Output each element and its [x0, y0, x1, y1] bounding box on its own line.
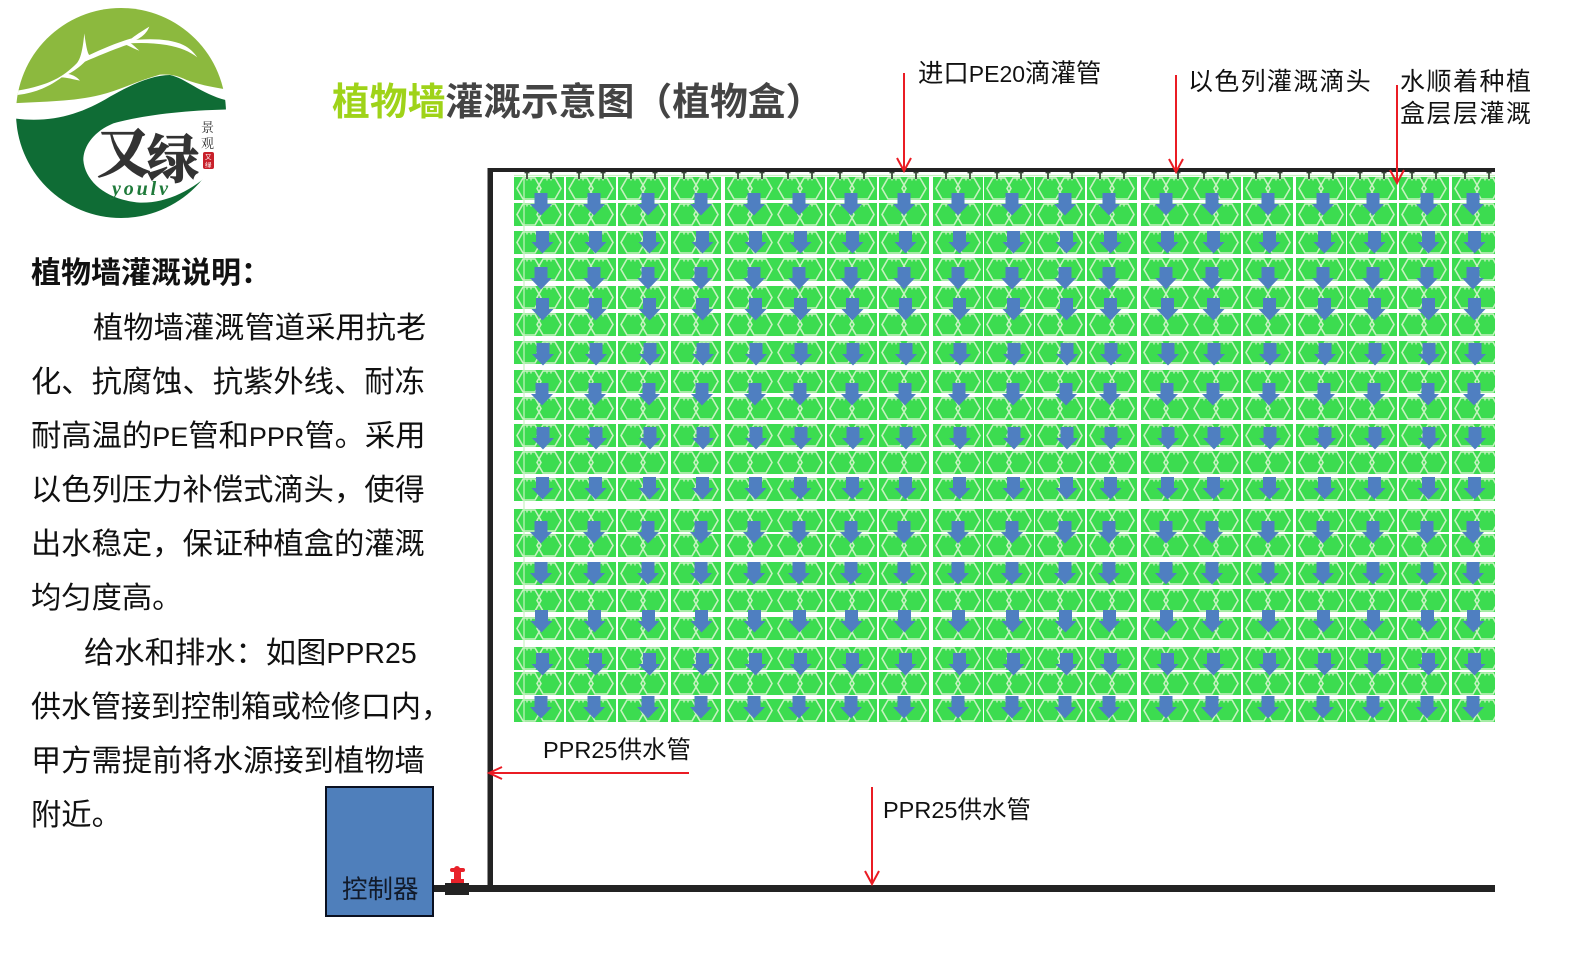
text block: water supply and drainage: 甲方需提前将水源接到植物墙 — [31, 744, 425, 778]
label: water flows through boxes: 盒层层灌溉 — [1400, 100, 1533, 128]
text block: pipe material — [31, 311, 426, 615]
text block: pipe material: 化、抗腐蚀、抗紫外线、耐冻 — [31, 365, 425, 399]
label: PPR25 vertical supply pipe: PPR25供水管 — [543, 736, 691, 764]
text block: pipe material: 均匀度高。 — [31, 581, 182, 615]
plant box cells — [514, 177, 1502, 722]
logo: 绿 — [147, 118, 199, 193]
water flow arrows — [530, 193, 1486, 718]
arrow: horizontal supply pipe — [865, 787, 879, 884]
logo: 观 — [201, 133, 214, 152]
icon: valve — [450, 866, 465, 883]
label: inlet PE20 drip pipe: 进口PE20滴灌管 — [918, 60, 1101, 88]
label: PPR25 horizontal supply pipe: PPR25供水管 — [883, 796, 1031, 824]
controller — [326, 787, 433, 916]
logo: 绿 — [205, 159, 212, 169]
text block: water supply and drainage — [31, 636, 451, 832]
arrow: dripper — [1169, 75, 1183, 172]
logo: 又 — [97, 111, 151, 188]
logo: youlv — [110, 178, 169, 200]
logo — [16, 8, 226, 218]
text block: water supply and drainage: 供水管接到控制箱或检修口内， — [31, 691, 451, 724]
arrow: vertical supply pipe — [489, 767, 689, 779]
text block: pipe material: 植物墙灌溉管道采用抗老 — [93, 311, 426, 345]
logo: 景 — [201, 117, 214, 136]
controller: 控制器 — [342, 876, 419, 904]
title: 植物墙灌溉示意图（植物盒） — [332, 82, 823, 124]
pipes — [433, 168, 1495, 895]
text block: water supply and drainage: 附近。 — [31, 798, 122, 832]
panel: plant wall grid — [514, 172, 1502, 722]
label: water flows through boxes: 水顺着种植 — [1400, 68, 1533, 96]
text block: water supply and drainage: 给水和排水：如图PPR25 — [84, 636, 417, 670]
label: water flows through boxes — [1400, 68, 1533, 128]
text block: pipe material: 出水稳定，保证种植盒的灌溉 — [31, 527, 425, 561]
label: Israeli dripper: 以色列灌溉滴头 — [1188, 68, 1372, 96]
arrow: inlet pipe — [897, 73, 911, 171]
arrow: water flow — [1390, 85, 1404, 183]
drippers — [524, 172, 1492, 179]
text block: pipe material: 以色列压力补偿式滴头，使得 — [31, 473, 425, 507]
logo: 又 — [205, 151, 212, 161]
panel: irrigation description — [31, 257, 451, 832]
heading: description: 植物墙灌溉说明： — [31, 257, 271, 290]
text block: pipe material: 耐高温的PE管和PPR管。采用 — [31, 419, 426, 453]
